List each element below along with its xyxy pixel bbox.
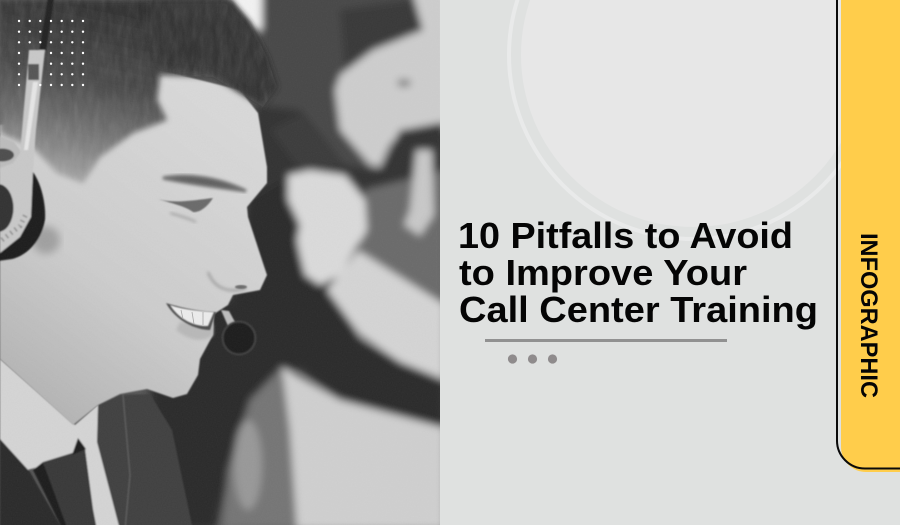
man: facial features <box>158 176 247 340</box>
man: face <box>0 70 267 425</box>
divider line <box>485 339 727 342</box>
title <box>458 215 818 330</box>
yellow side tab <box>841 0 900 472</box>
title: to Improve Your <box>459 252 747 293</box>
decorative circle <box>509 0 877 239</box>
background: blurred colleague <box>150 0 450 525</box>
ear <box>0 136 20 168</box>
photo grain <box>20 0 388 458</box>
man: jacket and shirt <box>0 359 193 525</box>
title: 10 Pitfalls to Avoid <box>458 215 793 256</box>
title: Call Center Training <box>459 289 818 330</box>
headset microphone <box>221 310 256 356</box>
three dots <box>508 354 557 364</box>
headset <box>0 0 60 261</box>
panel: right background <box>440 0 900 525</box>
black tab outline <box>837 0 900 468</box>
dot grid <box>18 20 84 86</box>
tab label: INFOGRAPHIC <box>855 233 882 398</box>
photo: call center agents <box>0 0 450 525</box>
man: hair <box>0 0 280 190</box>
